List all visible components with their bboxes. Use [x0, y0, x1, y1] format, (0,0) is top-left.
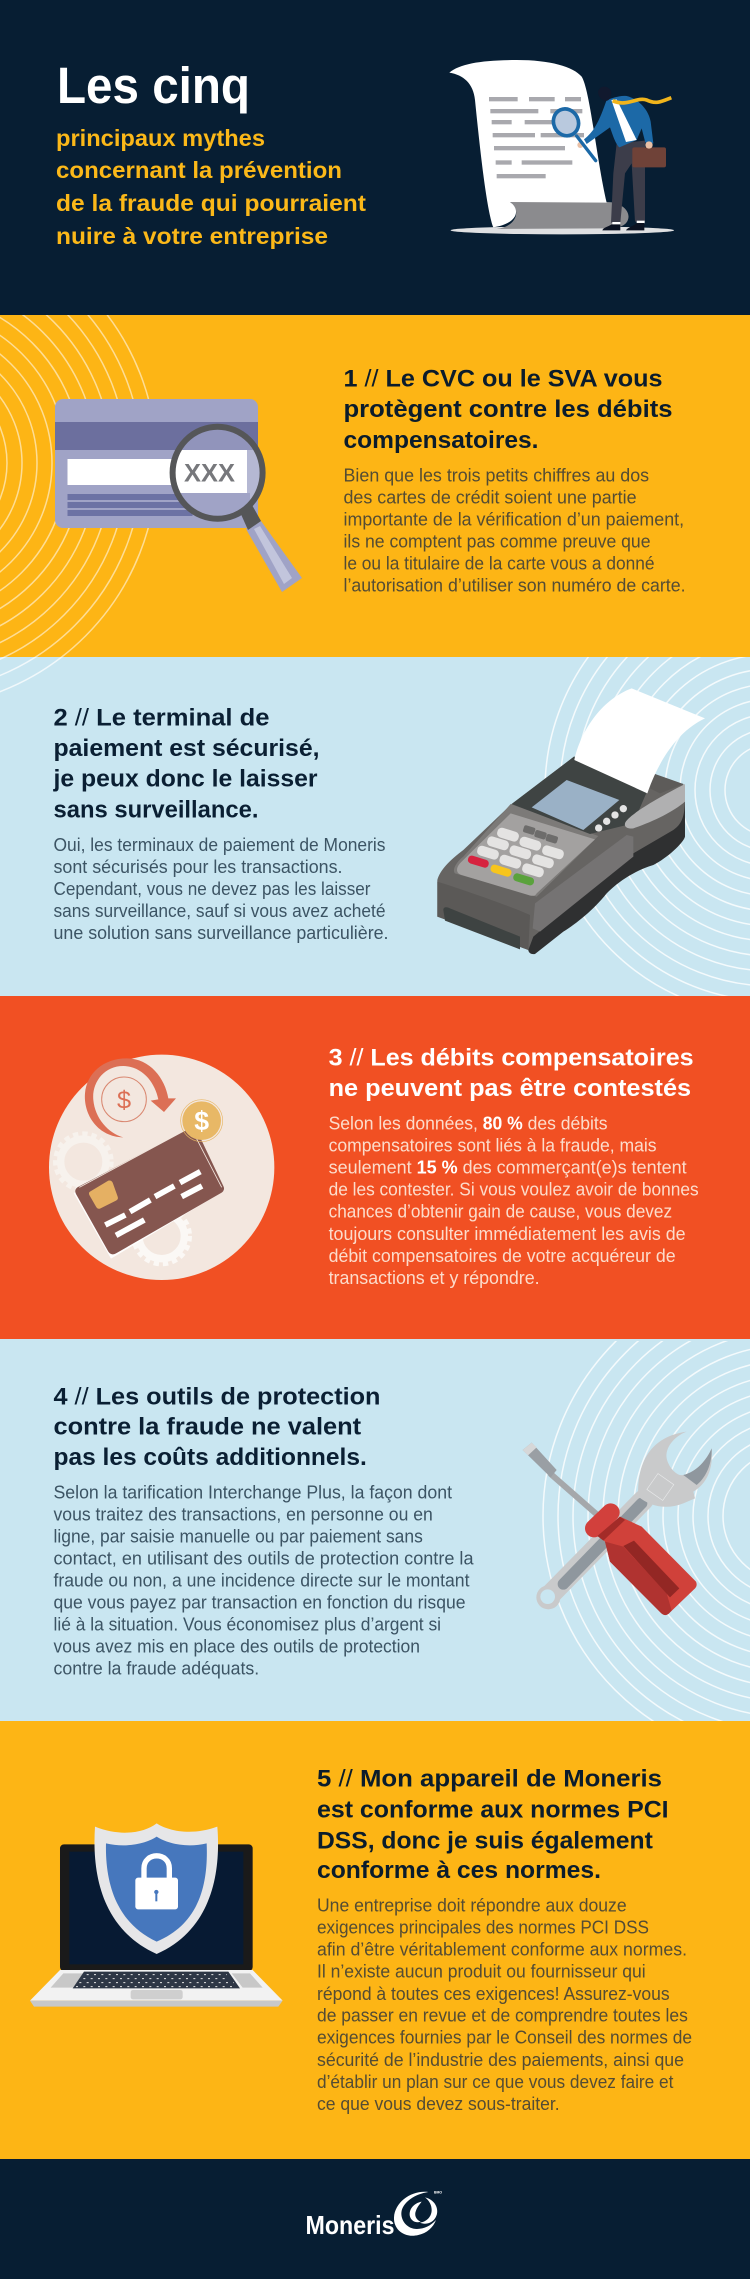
refund dollar: $: [117, 1086, 131, 1114]
panel: myth 3: [0, 996, 750, 1339]
body text: sans surveillance, sauf si vous avez acheté: [54, 901, 386, 921]
icon: laptop with shield and padlock: [30, 1823, 283, 2007]
body text: lié à la situation. Vous économisez plus d’argent si: [54, 1615, 441, 1635]
body text: Il n’existe aucun produit ou fournisseur qui: [317, 1961, 646, 1981]
body text: vous traitez des transactions, en personne ou en: [54, 1505, 433, 1525]
heading: 5 // Mon appareil de Moneris: [317, 1766, 662, 1793]
subtitle: nuire à votre entreprise: [56, 223, 328, 249]
subtitle: de la fraude qui pourraient: [56, 190, 366, 216]
subtitle: [56, 125, 366, 249]
body text: une solution sans surveillance particulière.: [54, 923, 388, 943]
logo: Moneris: BMO: [434, 2191, 442, 2195]
body text: l’autorisation d’utiliser son numéro de carte.: [344, 576, 686, 596]
body text: Une entreprise doit répondre aux douze: [317, 1895, 627, 1915]
body text: compensatoires sont liés à la fraude, mais: [329, 1136, 657, 1156]
body text: que vous payez par transaction en fonction du risque: [54, 1593, 466, 1613]
body text: Selon la tarification Interchange Plus, la façon dont: [54, 1483, 452, 1503]
body text: [329, 1113, 699, 1288]
body text: des cartes de crédit soient une partie: [344, 488, 636, 508]
heading: [52, 704, 320, 823]
heading: sans surveillance.: [54, 796, 258, 823]
heading: je peux donc le laisser: [52, 766, 318, 793]
logo: Moneris: [306, 2191, 442, 2240]
body text: exigences principales des normes PCI DSS: [317, 1918, 649, 1938]
panel: footer: [0, 2159, 750, 2279]
body text: sécurité de l’industrie des paiements, ainsi que: [317, 2050, 684, 2070]
panel: header: [0, 0, 750, 315]
body text: contact, en utilisant des outils de protection contre la: [54, 1549, 474, 1569]
panel: myth 1: [0, 315, 750, 657]
icon: credit card under magnifier: [55, 399, 302, 592]
heading: ne peuvent pas être contestés: [329, 1075, 691, 1102]
heading: est conforme aux normes PCI: [317, 1796, 669, 1823]
heading: contre la fraude ne valent: [54, 1414, 361, 1440]
body text: importante de la vérification d’un paiement,: [344, 510, 684, 530]
heading: [317, 1766, 669, 1884]
body text: Selon les données, 80 % des débits: [329, 1113, 608, 1133]
body text: Cependant, vous ne devez pas les laisser: [54, 879, 371, 899]
body text: contre la fraude adéquats.: [54, 1659, 259, 1679]
heading: DSS, donc je suis également: [317, 1827, 653, 1854]
subtitle: principaux mythes: [56, 125, 265, 151]
title: Les cinq: [57, 57, 250, 114]
heading: [329, 1044, 694, 1102]
body text: [54, 1483, 474, 1679]
body text: transactions et y répondre.: [329, 1268, 540, 1288]
body text: [54, 835, 388, 943]
heading: 4 // Les outils de protection: [54, 1383, 380, 1410]
decorative concentric rings: [0, 315, 150, 657]
body text: de passer en revue et de comprendre toutes les: [317, 2006, 688, 2026]
body text: ce que vous devez sous-traiter.: [317, 2094, 560, 2114]
heading: [344, 366, 672, 454]
body text: seulement 15 % des commerçant(e)s tentent: [329, 1158, 687, 1178]
body text: sont sécurisés pour les transactions.: [54, 857, 342, 877]
icon: wrench and screwdriver: [523, 1432, 712, 1615]
icon: payment terminal: [437, 688, 705, 954]
heading: compensatoires.: [344, 427, 538, 454]
body text: exigences fournies par le Conseil des normes de: [317, 2028, 692, 2048]
body text: Oui, les terminaux de paiement de Moneris: [54, 835, 386, 855]
body text: fraude ou non, a une incidence directe sur le montant: [54, 1571, 470, 1591]
body text: [344, 466, 686, 596]
heading: protègent contre les débits: [344, 396, 672, 423]
coin dollar: $: [194, 1106, 209, 1136]
heading: pas les coûts additionnels.: [54, 1444, 367, 1471]
body text: répond à toutes ces exigences! Assurez-vous: [317, 1984, 670, 2004]
body text: le ou la titulaire de la carte vous a donné: [344, 554, 654, 574]
icon: man inspecting document with magnifier: [449, 60, 674, 234]
body text: afin d’être véritablement conforme aux normes.: [317, 1939, 687, 1959]
body text: chances d’obtenir gain de cause, vous devez: [329, 1202, 672, 1222]
body text: de les contester. Si vous voulez avoir de bonnes: [329, 1180, 699, 1200]
body text: vous avez mis en place des outils de protection: [54, 1637, 420, 1657]
heading: 2 // Le terminal de: [54, 704, 270, 731]
heading: 3 // Les débits compensatoires: [329, 1044, 694, 1071]
body text: [317, 1895, 692, 2114]
heading: paiement est sécurisé,: [54, 735, 320, 762]
panel: myth 4: [0, 1339, 750, 1721]
heading: [54, 1383, 380, 1471]
body text: ligne, par saisie manuelle ou par paiement sans: [54, 1527, 423, 1547]
panel: myth 2: [0, 657, 750, 996]
heading: conforme à ces normes.: [317, 1857, 601, 1884]
body text: d’établir un plan sur ce que vous devez faire et: [317, 2072, 673, 2092]
body text: débit compensatoires de votre acquéreur de: [329, 1246, 676, 1266]
CVC digits: XXX: [184, 460, 235, 488]
panel: myth 5: [0, 1721, 750, 2159]
body text: Bien que les trois petits chiffres au dos: [344, 466, 649, 486]
icon: card, coins and gears in circle: [49, 1055, 274, 1280]
logo: Moneris: Moneris: [306, 2210, 394, 2240]
body text: ils ne comptent pas comme preuve que: [344, 532, 650, 552]
heading: 1 // Le CVC ou le SVA vous: [344, 366, 662, 393]
subtitle: concernant la prévention: [56, 157, 342, 183]
body text: toujours consulter immédiatement les avis de: [329, 1224, 686, 1244]
